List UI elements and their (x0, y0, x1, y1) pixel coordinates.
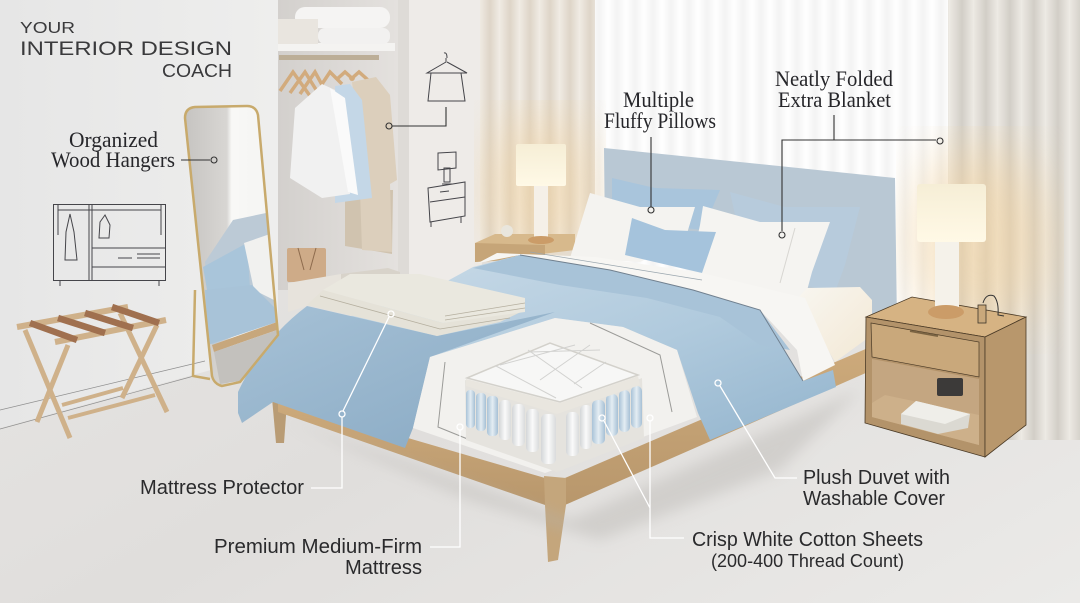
mirror glass (185, 106, 278, 386)
pillow: back left (612, 178, 720, 230)
left lamp (501, 144, 566, 244)
floor shadow under bed (285, 390, 860, 540)
label: neatly folded extra blanket: Neatly Folded (775, 66, 893, 91)
callout: blanket pointer (779, 115, 943, 238)
mattress pocket coils (466, 386, 642, 464)
reflection: bedding (205, 285, 277, 345)
label: plush duvet (803, 467, 950, 510)
label: plush duvet: Plush Duvet with (803, 467, 950, 489)
label: crisp cotton sheets (692, 529, 923, 571)
panel: left wall (0, 0, 278, 428)
lamp glow left (485, 115, 595, 265)
nightstand cavity (872, 359, 979, 445)
white fold band (478, 253, 835, 381)
mirror (185, 106, 278, 386)
label: premium mattress (214, 536, 422, 579)
nightstand top (866, 297, 1026, 337)
label: multiple fluffy pillows: Multiple (623, 87, 694, 112)
icon: wardrobe sketch (54, 204, 166, 286)
callout: sheets pointer (599, 415, 684, 538)
label: mattress protector: Mattress Protector (140, 477, 304, 499)
reflection: headboard (205, 213, 276, 345)
pillow: front right (690, 206, 830, 298)
brand logo (20, 20, 232, 81)
label: premium mattress: Mattress (345, 557, 422, 579)
books (901, 401, 970, 434)
lower left duvet (238, 306, 555, 448)
label: organized wood hangers: Organized (69, 127, 158, 152)
label: organized wood hangers (51, 127, 175, 172)
closet boxes (288, 274, 341, 312)
folded extra blanket (307, 274, 525, 336)
label: organized wood hangers: Wood Hangers (51, 147, 175, 172)
pillow: back right (730, 192, 860, 292)
storage box (278, 19, 318, 44)
mattress side and base (465, 378, 644, 472)
stacked pillows (295, 7, 390, 44)
label: crisp cotton sheets: (200-400 Thread Count) (711, 551, 904, 571)
mirror frame (185, 106, 278, 386)
blue shirts (335, 84, 372, 203)
callout: closet pointer (386, 107, 446, 129)
headboard (604, 148, 897, 325)
nightstand drawer (871, 323, 979, 377)
shelf (278, 43, 395, 51)
icon: hanger sketch (427, 53, 467, 101)
panel: column wall (397, 0, 482, 285)
callout: protector pointer (311, 311, 394, 488)
mattress protector (413, 318, 697, 473)
callout: duvet pointer (715, 380, 797, 478)
socket (937, 378, 963, 396)
reflection: frame (212, 322, 277, 352)
lamp glow right (910, 145, 1050, 335)
pillow: front left (570, 193, 695, 262)
pillow: small blue (625, 218, 716, 273)
handbag (287, 248, 326, 282)
panel: rear curtains right (948, 0, 1080, 440)
duvet (238, 252, 872, 448)
brand line 3: COACH (162, 61, 232, 81)
brand line 1: YOUR (20, 20, 75, 37)
brand line 2: INTERIOR DESIGN (20, 39, 232, 60)
label: crisp cotton sheets: Crisp White Cotton Sheets (692, 529, 923, 551)
right lamp (917, 184, 986, 319)
callout: hangers pointer (181, 157, 217, 163)
icon: lamp and nightstand sketch (428, 152, 465, 227)
luggage rack (17, 307, 167, 438)
closet (278, 0, 400, 312)
mirror rear stand (193, 290, 210, 379)
label: neatly folded extra blanket: Extra Blanket (778, 87, 891, 112)
mattress quilted top (467, 343, 638, 402)
premium mattress (465, 343, 644, 472)
left nightstand (475, 234, 575, 262)
label: neatly folded extra blanket (775, 66, 893, 112)
upper duvet darker fold band (473, 255, 790, 350)
reflection: floor (214, 330, 277, 384)
leg: front (544, 476, 566, 562)
label: plush duvet: Washable Cover (803, 488, 945, 510)
panel: rear curtains left (480, 0, 596, 250)
right nightstand (865, 295, 1026, 457)
reflection: pillows (203, 243, 250, 290)
bed frame (272, 348, 868, 562)
fitted sheet (798, 287, 872, 362)
callout: pillows pointer (648, 137, 654, 213)
nightstand body (865, 317, 985, 457)
rail (279, 55, 379, 60)
white shirts (290, 84, 358, 198)
pillows (570, 178, 860, 298)
upper duvet (340, 255, 836, 440)
panel: sheer window curtains (595, 0, 950, 310)
beige coats (345, 77, 397, 254)
wood hangers (280, 72, 368, 104)
callout: mattress pointer (430, 424, 463, 547)
label: multiple fluffy pillows: Fluffy Pillows (604, 108, 716, 133)
label: premium mattress: Premium Medium-Firm (214, 536, 422, 558)
label: multiple fluffy pillows (604, 87, 716, 133)
charger (978, 295, 1004, 323)
